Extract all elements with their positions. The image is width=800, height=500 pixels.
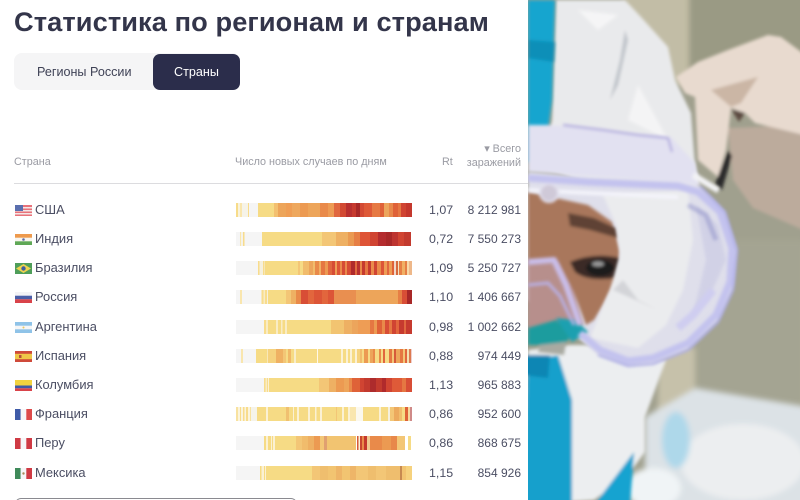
- goggle lens interior: [528, 172, 737, 366]
- white hood lining inside goggles: [590, 190, 726, 348]
- tab switcher: [14, 53, 240, 90]
- Rt value: 1,13: [429, 378, 453, 392]
- total: 952 600: [478, 407, 521, 421]
- background wall: [528, 0, 800, 500]
- heat bar: [236, 320, 412, 334]
- Rt value: 0,86: [429, 407, 453, 421]
- table header: [14, 143, 528, 184]
- Rt value: 0,88: [429, 349, 453, 363]
- heat bar: [236, 290, 412, 304]
- Rt value: 0,86: [429, 436, 453, 450]
- heat bar: [236, 436, 412, 450]
- column: total infections: ▾ Всего: [484, 143, 521, 155]
- Rt value: 1,15: [429, 466, 453, 480]
- flag: France: [15, 409, 32, 420]
- flag: Colombia: [15, 380, 32, 391]
- flag: Argentina: [15, 322, 32, 333]
- heat bar: [236, 378, 412, 392]
- heat bar: [236, 203, 412, 217]
- total: 1 406 667: [468, 290, 521, 304]
- total: 8 212 981: [468, 203, 521, 217]
- row: Мексика: [15, 465, 521, 480]
- heat bar: [236, 407, 412, 421]
- row: Колумбия: [15, 377, 521, 392]
- lower suit: [523, 345, 666, 500]
- Rt value: 0,98: [429, 320, 453, 334]
- country name: Перу: [35, 435, 65, 450]
- flag: Russia: [15, 292, 32, 303]
- blanket in foreground: [625, 388, 800, 500]
- total: 1 002 662: [468, 320, 521, 334]
- blue suit collar upper: [528, 0, 555, 162]
- total: 5 250 727: [468, 261, 521, 275]
- Rt value: 0,72: [429, 232, 453, 246]
- glove and arm: [676, 35, 800, 232]
- country name: Бразилия: [35, 260, 92, 275]
- title: Статистика по регионам и странам: [14, 6, 489, 37]
- Rt value: 1,07: [429, 203, 453, 217]
- country name: Мексика: [35, 465, 86, 480]
- country name: Колумбия: [35, 377, 94, 392]
- country name: Франция: [35, 406, 88, 421]
- row: Аргентина: [15, 319, 521, 334]
- Rt value: 1,10: [429, 290, 453, 304]
- tab: regions: Регионы России: [37, 65, 132, 79]
- column: Rt: Rt: [442, 156, 453, 168]
- surgical mask, teal: [528, 318, 588, 355]
- column: country: Страна: [14, 156, 51, 168]
- row: Франция: [15, 406, 521, 421]
- face: [528, 192, 620, 335]
- row: Перу: [15, 435, 521, 450]
- hood, white suit: [542, 0, 698, 215]
- flag: Mexico: [15, 468, 32, 479]
- show more button (cropped): [15, 498, 297, 500]
- photo: medic in protective suit and goggles: [528, 0, 800, 500]
- total: 965 883: [478, 378, 521, 392]
- flag: Peru: [15, 438, 32, 449]
- total: 868 675: [478, 436, 521, 450]
- flag: Spain: [15, 351, 32, 362]
- total: 7 550 273: [468, 232, 521, 246]
- heat bar: [236, 261, 412, 275]
- total: 854 926: [478, 466, 521, 480]
- column: total infections: заражений: [467, 157, 521, 169]
- goggle strap clip: [692, 172, 720, 193]
- heat bar: [236, 232, 412, 246]
- flag: India: [15, 234, 32, 245]
- row: Бразилия: [15, 260, 521, 275]
- goggles: [528, 125, 737, 366]
- flag: Brazil: [15, 263, 32, 274]
- row: США: [15, 202, 521, 217]
- heat bar: [236, 466, 412, 480]
- tab: countries active: Страны: [174, 65, 219, 79]
- country name: Испания: [35, 348, 86, 363]
- flag: USA: [15, 205, 32, 216]
- heat bar: [236, 349, 412, 363]
- row: Россия: [15, 289, 521, 304]
- row: Индия: [15, 231, 521, 246]
- country name: США: [35, 202, 65, 217]
- country name: Россия: [35, 289, 77, 304]
- total: 974 449: [478, 349, 521, 363]
- country name: Индия: [35, 231, 73, 246]
- column: total infections: [467, 143, 521, 169]
- Rt value: 1,09: [429, 261, 453, 275]
- country name: Аргентина: [35, 319, 97, 334]
- tab: countries active: [153, 54, 240, 90]
- column: new cases by day: Число новых случаев по дням: [235, 156, 387, 168]
- row: Испания: [15, 348, 521, 363]
